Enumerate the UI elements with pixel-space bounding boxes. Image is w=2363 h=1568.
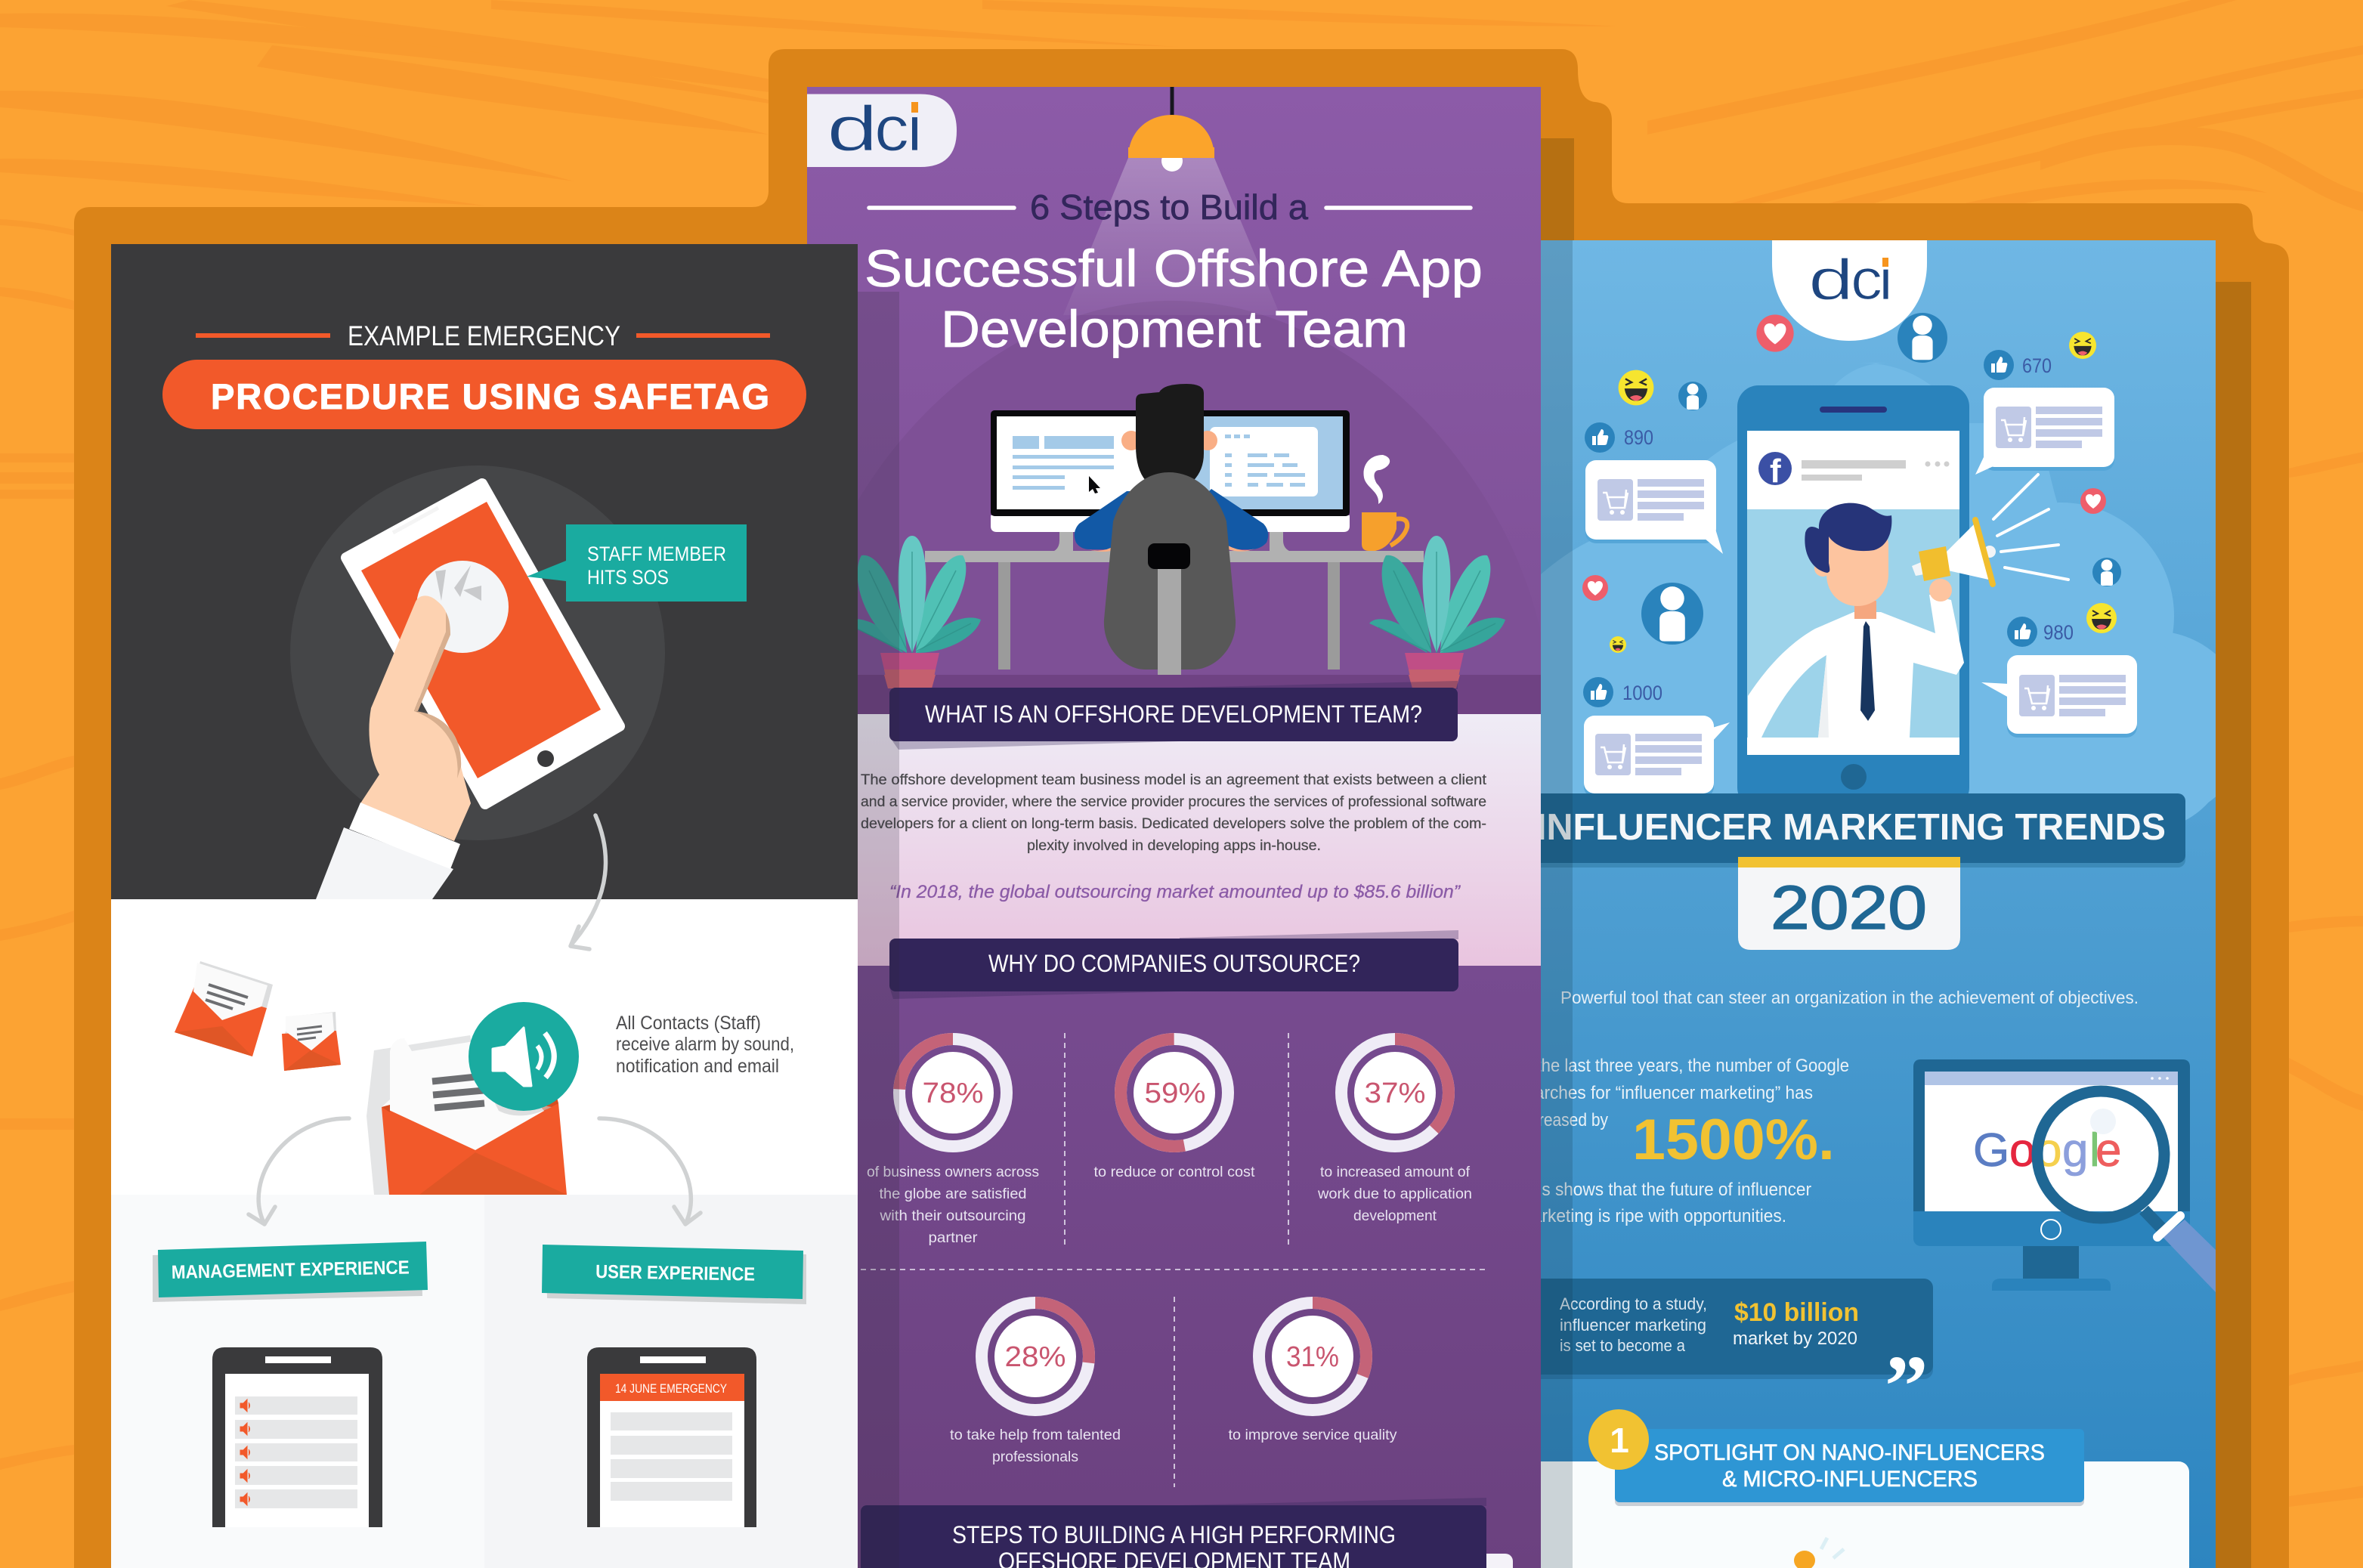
google search statistic text: searches for “influencer marketing” has (1517, 1083, 1813, 1103)
white card peek (869, 1554, 1513, 1568)
heading: steps to building: STEPS TO BUILDING A HIGH PERFORMING (952, 1521, 1396, 1548)
bubble: 1000 likes: 1000 (1622, 682, 1662, 704)
monitor with google and magnifier: G (1973, 1124, 2009, 1177)
contacts description (616, 1013, 794, 1077)
banner: management experience (153, 1242, 428, 1302)
donut: 37%: 37% (1365, 1078, 1425, 1109)
subtitle: EXAMPLE EMERGENCY (348, 320, 620, 351)
donut: 28% (982, 1303, 1089, 1410)
plant left (845, 536, 981, 688)
label: 78% (867, 1164, 1039, 1246)
donut: 28%: 28% (1005, 1341, 1066, 1373)
phone: management experience (212, 1347, 382, 1527)
label: 37%: work due to application (1317, 1186, 1472, 1202)
clouds (1541, 363, 2248, 831)
lamp light beam (1063, 158, 1280, 315)
donut: 78% (896, 1036, 1010, 1149)
bubble: 980 likes (1981, 617, 2137, 738)
year badge (1738, 857, 1960, 950)
heading: why do companies outsource (889, 930, 1458, 999)
section 1 card (1511, 1409, 2189, 1568)
label: 78%: of business owners across (867, 1164, 1039, 1180)
bubble: 890 likes (1585, 422, 1723, 554)
label: 31%: to improve service quality (1229, 1427, 1397, 1443)
pot bases over ground (884, 675, 1460, 688)
logo badge: c (874, 93, 909, 164)
panel: offshore app development team (807, 87, 1541, 1568)
logo badge (807, 93, 957, 167)
logo badge: i (907, 93, 923, 164)
intro sentence: Powerful tool that can steer an organization in the achievement of objectives. (1560, 988, 2139, 1007)
bubble: 670 likes (1975, 350, 2114, 475)
google search statistic text: increased by (1518, 1110, 1608, 1130)
panel: emergency procedure using safetag (111, 244, 858, 1568)
quote box: $10 billion: influencer marketing (1560, 1316, 1706, 1335)
title banner (1511, 793, 2185, 868)
callout: staff member hits sos: STAFF MEMBER (587, 543, 726, 565)
quote box: $10 billion: According to a study, (1560, 1294, 1707, 1313)
definition paragraph: The offshore development team business model is an agreement that exists between a client (861, 772, 1487, 788)
heading: steps to building (861, 1498, 1486, 1568)
icons: floating reactions (1582, 313, 2121, 653)
quote box: $10 billion: $10 billion (1734, 1298, 1859, 1327)
contacts description: receive alarm by sound, (616, 1034, 794, 1055)
label: 78%: the globe are satisfied (880, 1186, 1026, 1202)
icon: cursor (1089, 476, 1100, 493)
definition paragraph: developers for a client on long-term basis. Dedicated developers solve the problem of the com- (861, 816, 1486, 832)
background arch (807, 301, 1541, 675)
heading rules (869, 206, 1471, 210)
small envelope one (175, 961, 273, 1056)
monitor with google and magnifier: o (2036, 1124, 2061, 1177)
dividers (861, 1033, 1486, 1487)
logo badge (1772, 240, 1927, 341)
plant right (1369, 536, 1505, 688)
heading: why do companies outsource: WHY DO COMPANIES OUTSOURCE? (988, 950, 1360, 977)
big number 1500%: 1500%. (1632, 1108, 1835, 1172)
section 1 banner (1615, 1429, 2084, 1506)
donut: 59%: 59% (1144, 1078, 1206, 1109)
icon: facebook post header: f (1770, 453, 1781, 490)
quote box: $10 billion: is set to become a (1560, 1336, 1686, 1355)
contacts description: All Contacts (Staff) (616, 1013, 761, 1034)
icon: facebook post header (1758, 452, 1950, 490)
google search statistic text (1517, 1056, 1849, 1226)
callout: staff member hits sos (527, 524, 747, 602)
arrow: to user experience (599, 1118, 701, 1224)
arrow: to management experience (249, 1118, 349, 1224)
developer at desk (1075, 384, 1268, 676)
label: 78%: with their outsourcing (879, 1208, 1026, 1224)
heading: what is an offshore development team (889, 681, 1458, 750)
year badge: 2020 (1771, 874, 1927, 942)
bubble: 980 likes: 980 (2043, 621, 2074, 644)
logo badge: i (1879, 248, 1893, 312)
section 1 banner: & MICRO-INFLUENCERS (1722, 1467, 1978, 1492)
quote box: $10 billion: ” (1885, 1338, 1928, 1434)
ground band (807, 675, 1541, 714)
section 1 number badge (1588, 1409, 1649, 1470)
logo badge: d (827, 93, 878, 164)
quote box: $10 billion (1511, 1279, 1933, 1434)
donut: 31% (1259, 1303, 1366, 1410)
phone press illustration (290, 465, 747, 899)
google search statistic text: This shows that the future of influencer (1518, 1180, 1811, 1200)
callout: staff member hits sos: HITS SOS (587, 566, 669, 589)
desk (925, 532, 1424, 670)
label: 78%: partner (928, 1230, 978, 1246)
phone: user experience (587, 1347, 756, 1527)
donut: 37% (1341, 1039, 1449, 1146)
label: 28% (950, 1427, 1121, 1465)
man with megaphone (1748, 503, 1996, 738)
megaphone sound rays (1993, 475, 2068, 580)
market quote: “In 2018, the global outsourcing market amounted up to $85.6 billion” (889, 882, 1461, 902)
logo badge: c (1851, 248, 1882, 312)
label: 37% (1317, 1164, 1472, 1224)
main title: Successful Offshore App (864, 240, 1483, 298)
quote box: $10 billion: market by 2020 (1733, 1328, 1857, 1349)
donut: 59% (1112, 1030, 1237, 1155)
big envelope with alarm (367, 1002, 579, 1195)
label: 59%: to reduce or control cost (1094, 1164, 1255, 1180)
bubble: 890 likes: 890 (1624, 426, 1653, 449)
main title: Development Team (941, 300, 1408, 358)
monitor with google and magnifier: o (2009, 1124, 2035, 1177)
frame shadows (1541, 138, 2251, 1568)
bubble: 670 likes: 670 (2022, 354, 2052, 377)
definition paragraph: and a service provider, where the service provider procures the services of professional software (861, 794, 1486, 810)
monitor with google and magnifier: g (2062, 1124, 2088, 1177)
monitor with google and magnifier: e (2095, 1124, 2121, 1177)
monitor with google and magnifier (1913, 1059, 2216, 1292)
panel: influencer marketing trends (1511, 240, 2248, 1568)
banner: management experience: MANAGEMENT EXPERIENCE (172, 1257, 410, 1283)
section 1 number badge: 1 (1610, 1421, 1629, 1460)
donut: 31%: 31% (1286, 1341, 1339, 1373)
contacts description: notification and email (616, 1056, 779, 1077)
hand (360, 595, 471, 841)
donut: 78%: 78% (922, 1078, 984, 1109)
title pill: PROCEDURE USING SAFETAG (211, 376, 769, 416)
definition paragraph: plexity involved in developing apps in-house. (1027, 838, 1321, 854)
icon: megaphone peek (1794, 1538, 1844, 1568)
banner: user experience: USER EXPERIENCE (595, 1261, 755, 1285)
cast shadow of purple panel (1541, 240, 1573, 1568)
monitor (991, 410, 1350, 532)
main title (864, 240, 1483, 358)
google search statistic text: In the last three years, the number of Google (1518, 1056, 1849, 1076)
label: 28%: to take help from talented (950, 1427, 1121, 1443)
google search statistic text: marketing is ripe with opportunities. (1518, 1206, 1786, 1226)
pendant lamp (1128, 87, 1214, 172)
dark section background (807, 966, 1541, 1568)
definition paragraph (861, 772, 1487, 854)
label: 28%: professionals (992, 1449, 1078, 1465)
title pill (162, 360, 806, 429)
bubble: 1000 likes (1583, 677, 1730, 797)
monitor with google and magnifier: l (2089, 1124, 2100, 1177)
title banner: INFLUENCER MARKETING TRENDS (1536, 807, 2166, 848)
subtitle: 6 Steps to Build a (1030, 187, 1308, 227)
coffee mug with steam (1362, 455, 1407, 551)
cast shadow of left panel (858, 292, 899, 1568)
heading: what is an offshore development team: WHAT IS AN OFFSHORE DEVELOPMENT TEAM? (925, 700, 1422, 728)
icon: speaker (469, 1002, 579, 1111)
heading rules (196, 333, 770, 338)
arrow: phone to contacts (571, 815, 606, 949)
small envelope two (282, 1012, 341, 1071)
label: 37%: to increased amount of (1320, 1164, 1471, 1180)
phone: user experience: 14 JUNE EMERGENCY (615, 1381, 727, 1396)
logo badge: d (1808, 248, 1854, 312)
banner: user experience (542, 1245, 806, 1304)
section 1 banner: SPOTLIGHT ON NANO-INFLUENCERS (1654, 1440, 2045, 1465)
light section background (807, 714, 1541, 966)
label: 37%: development (1353, 1208, 1437, 1224)
phone with influencer (1737, 385, 2068, 809)
